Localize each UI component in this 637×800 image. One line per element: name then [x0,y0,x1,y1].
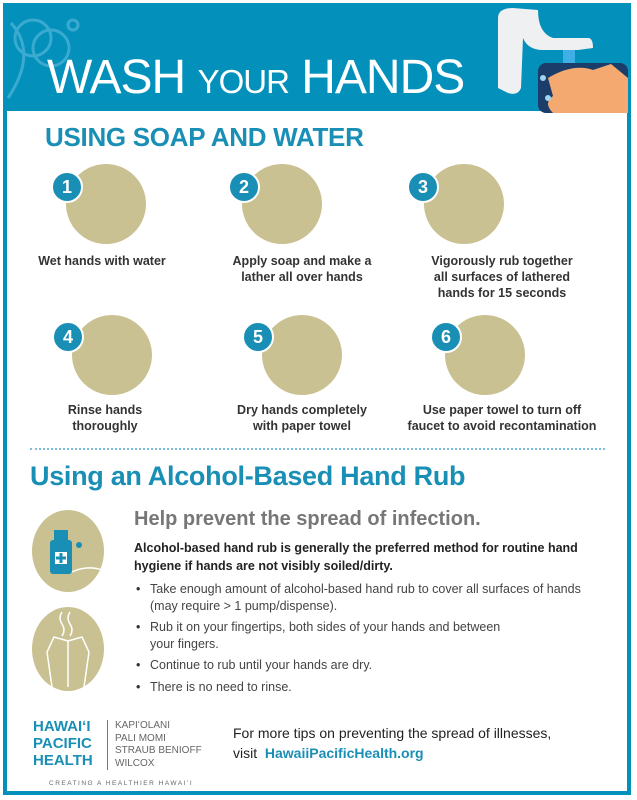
text block: hand rub: Help prevent the spread of infection. [134,508,481,530]
step 5: Dry hands completely [237,403,367,417]
icon: rubbing hands [32,607,104,691]
header banner [3,3,631,111]
step 6 [408,315,596,433]
step 5: with paper towel [253,419,351,433]
step 5: 5 [253,327,263,347]
text block: hand rub: Alcohol-based hand rub is generally the preferred method for routine hand hygiene if hands are not visibly soiled/dirty. [134,541,578,573]
logo: STRAUB BENIOFF [115,745,202,756]
step 2 [230,164,372,284]
step 3: 3 [418,177,428,197]
step 4 [54,315,152,433]
step 2: 2 [239,177,249,197]
heading: soap and water: USING SOAP AND WATER [45,122,364,152]
logo: WILCOX [115,758,154,768]
text block: hand rub [134,508,581,694]
step 6: Use paper towel to turn off [423,403,581,417]
step 1: Wet hands with water [38,254,166,268]
text block: hand rub: your fingers. [150,636,219,650]
logo: HEALTH [33,752,93,769]
footer text [233,725,551,761]
step 1: 1 [62,177,72,197]
logo: HAWAIʻI [33,718,91,735]
step 3: all surfaces of lathered [434,270,570,284]
step 4: 4 [63,327,73,347]
text block: hand rub: Rub it on your fingertips, both sides of your hands and between [150,620,500,634]
heading: alcohol-based hand rub: Using an Alcohol-Based Hand Rub [30,461,465,491]
step 6: faucet to avoid recontamination [408,419,596,433]
text block: hand rub: Take enough amount of alcohol-based hand rub to cover all surfaces of hands (may require > 1 pump/dispense). [150,582,581,612]
text block: hand rub: There is no need to rinse. [150,680,292,694]
logo: PALI MOMI [115,732,166,744]
step 3 [409,164,573,300]
text block: hand rub: Continue to rub until your hands are dry. [150,658,372,672]
logo: CREATING A HEALTHIER HAWAIʻI [49,780,193,787]
step 3: hands for 15 seconds [438,286,566,300]
step 4: Rinse hands [68,403,142,417]
logo [33,718,202,787]
footer text: visit HawaiiPacificHealth.org [233,745,424,761]
step 2: Apply soap and make a [233,254,371,268]
step 5 [237,315,367,433]
footer text: For more tips on preventing the spread of illnesses, [233,725,551,741]
icon: faucet and hands [498,8,628,113]
logo: KAPIʻOLANI [115,720,170,731]
step 1 [38,164,166,268]
icon: sanitizer [32,510,104,592]
step 6: 6 [441,327,451,347]
step 3: Vigorously rub together [431,254,573,268]
step 4: thoroughly [72,419,138,433]
title: WASH YOUR HANDS [47,51,464,104]
logo: PACIFIC [33,735,92,752]
step 2: lather all over hands [241,270,363,284]
